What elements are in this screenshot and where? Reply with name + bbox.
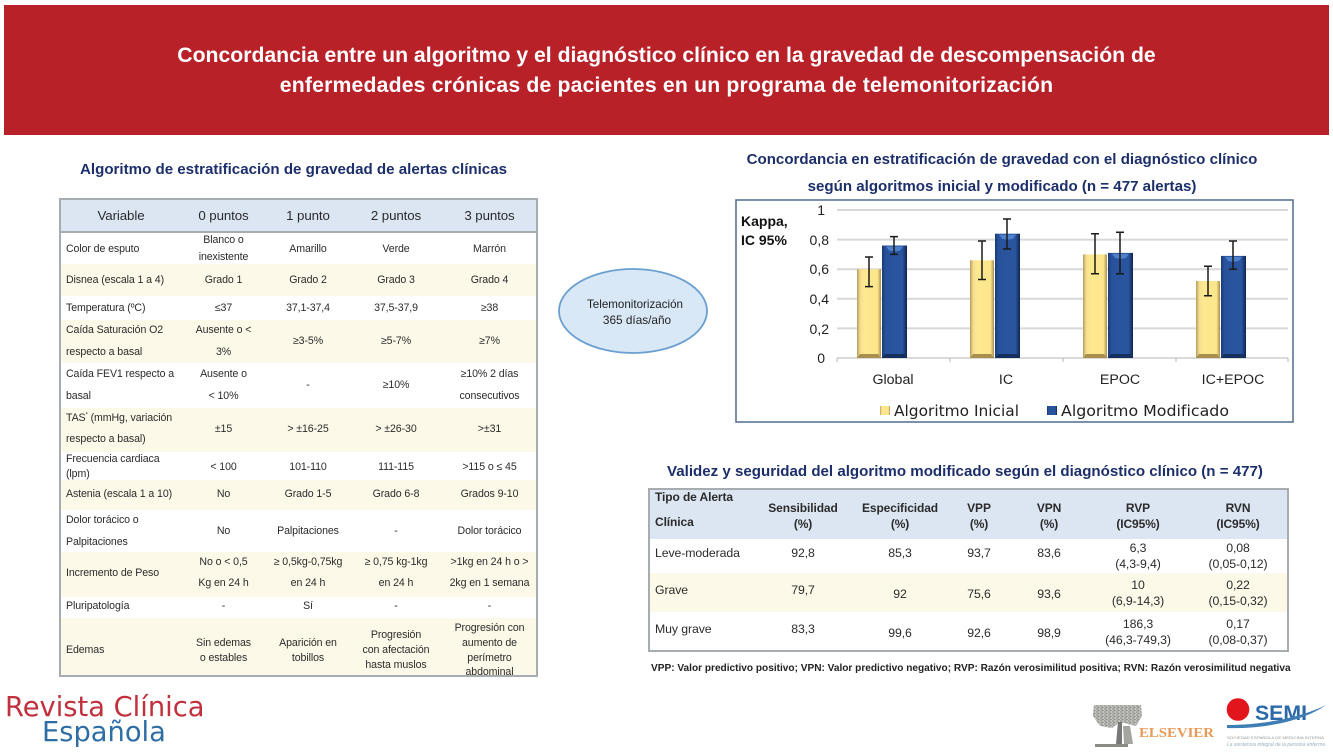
title: enfermedades crónicas de pacientes en un programa de telemonitorización	[280, 74, 1053, 97]
logo: Elsevier: ELSEVIER	[1139, 725, 1214, 740]
table: validity and safety: 92,6	[967, 626, 991, 640]
table: severity stratification algorithm: 2kg en 1 semana	[450, 577, 529, 589]
table: validity and safety: 0,17	[1226, 616, 1250, 630]
table: validity and safety: (IC95%)	[1116, 516, 1160, 530]
legend: Algoritmo Modificado	[1061, 402, 1229, 420]
title: Concordancia entre un algoritmo y el diagnóstico clínico en la gravedad de descompensación de	[177, 44, 1156, 67]
legend	[880, 402, 1229, 420]
ellipse: telemonitoring: Telemonitorización	[587, 297, 683, 311]
table: validity and safety: 10	[1131, 578, 1145, 592]
table: validity and safety: Clínica	[655, 515, 694, 529]
table: validity and safety: Tipo de Alerta	[655, 490, 733, 504]
table: validity and safety: (%)	[1040, 516, 1058, 530]
footnote: abbreviations: VPP: Valor predictivo positivo; VPN: Valor predictivo negativo; RVP: Razón verosimilitud positiva; RVN: Razón verosimilitud negativa	[651, 663, 1291, 674]
table: severity stratification algorithm: Verde	[382, 242, 410, 254]
logo: Revista Clínica Española: Española	[42, 717, 166, 748]
ellipse: telemonitoring: 365 días/año	[603, 313, 672, 327]
y axis labels: 0,6	[810, 261, 829, 277]
table: severity stratification algorithm: Variable	[98, 208, 144, 222]
heading: validity table: Validez y seguridad del algoritmo modificado según el diagnóstico clínico (n = 477)	[667, 463, 1263, 480]
table: severity stratification algorithm: -	[394, 600, 398, 612]
table: validity and safety: RVP	[1126, 500, 1150, 514]
table: severity stratification algorithm: Grado 1-5	[285, 488, 331, 500]
bars: IC	[970, 219, 1020, 358]
table: severity stratification algorithm: Incremento de Peso	[66, 566, 159, 578]
table: severity stratification algorithm: Progresión	[371, 629, 421, 641]
table: validity and safety: 6,3	[1130, 540, 1146, 554]
title	[177, 44, 1156, 97]
table: severity stratification algorithm: Ausente o <	[196, 324, 251, 336]
table: validity and safety: RVN	[1226, 500, 1250, 514]
table: severity stratification algorithm: ±15	[215, 422, 232, 434]
category labels: EPOC	[1100, 372, 1140, 388]
y axis labels: 0,8	[810, 232, 829, 248]
table: validity and safety: (46,3-749,3)	[1105, 632, 1171, 646]
axis title: Kappa,	[741, 213, 788, 229]
table: validity and safety: 0,08	[1226, 540, 1250, 554]
table: severity stratification algorithm: ≥3-5%	[293, 335, 323, 347]
table: severity stratification algorithm: ≥10%	[383, 379, 409, 391]
table: severity stratification algorithm: tobillos	[292, 652, 324, 664]
table: severity stratification algorithm: Pluripatología	[66, 600, 129, 612]
table: severity stratification algorithm: Kg en 24 h	[198, 577, 249, 589]
table: severity stratification algorithm: o estables	[200, 652, 247, 664]
table: validity and safety: 92	[893, 587, 907, 601]
table: severity stratification algorithm: con afectación	[363, 644, 429, 656]
table: severity stratification algorithm: -	[222, 600, 225, 612]
table: severity stratification algorithm: Sin edemas	[196, 637, 251, 649]
table: validity and safety: 79,7	[791, 582, 815, 596]
logo: Revista Clínica Española	[5, 692, 204, 748]
table: severity stratification algorithm: < 100	[210, 460, 237, 472]
table: severity stratification algorithm: Progresión con	[455, 622, 524, 634]
table: severity stratification algorithm: 3 puntos	[464, 208, 515, 222]
table: severity stratification algorithm: Caída FEV1 respecto a	[66, 368, 174, 380]
table: validity and safety: (%)	[970, 516, 988, 530]
table: severity stratification algorithm: -	[306, 379, 310, 391]
table: severity stratification algorithm: Aparición en	[279, 637, 337, 649]
table: severity stratification algorithm: No	[217, 525, 230, 537]
table: severity stratification algorithm: Grado 3	[377, 274, 415, 286]
table: validity and safety: 93,7	[967, 546, 991, 560]
table: severity stratification algorithm: ≥38	[481, 302, 498, 314]
y axis labels: 0,4	[810, 291, 829, 307]
table: severity stratification algorithm: -	[488, 600, 491, 612]
table: severity stratification algorithm: Blanco o	[203, 234, 244, 246]
table: validity and safety: (0,08-0,37)	[1208, 632, 1268, 646]
table: validity and safety: (%)	[891, 516, 909, 530]
table: severity stratification algorithm: < 10%	[209, 390, 238, 402]
table: severity stratification algorithm	[59, 198, 538, 677]
table: severity stratification algorithm: 101-110	[289, 460, 327, 472]
y axis labels	[810, 202, 829, 366]
bars: EPOC	[1083, 232, 1133, 358]
category labels: IC+EPOC	[1202, 372, 1264, 388]
table: severity stratification algorithm: Color de esputo	[66, 242, 139, 254]
table: validity and safety: 98,9	[1037, 626, 1061, 640]
table: severity stratification algorithm: Frecuencia cardiaca	[66, 453, 160, 465]
axis title: IC 95%	[741, 232, 787, 248]
y axis labels: 1	[817, 202, 825, 218]
table: severity stratification algorithm: >1kg en 24 h o >	[451, 556, 528, 568]
table: validity and safety: (0,05-0,12)	[1208, 556, 1268, 570]
table: validity and safety: 93,6	[1037, 587, 1061, 601]
table: severity stratification algorithm: > ±26-30	[375, 422, 417, 434]
table: severity stratification algorithm: Marrón	[473, 242, 506, 254]
table: severity stratification algorithm: TAS* (mmHg, variación	[66, 412, 172, 424]
table: validity and safety: 186,3	[1123, 616, 1153, 630]
table: severity stratification algorithm: ≥5-7%	[381, 335, 411, 347]
table: severity stratification algorithm: 1 punto	[286, 208, 330, 222]
table: severity stratification algorithm: 37,1-37,4	[286, 302, 330, 314]
table: severity stratification algorithm: ≤37	[215, 302, 232, 314]
ellipse: telemonitoring	[558, 268, 708, 354]
table: severity stratification algorithm: consecutivos	[459, 390, 520, 402]
table: severity stratification algorithm: Astenia (escala 1 a 10)	[66, 488, 172, 500]
table: severity stratification algorithm: Palpitaciones	[277, 525, 339, 537]
table: severity stratification algorithm: 37,5-37,9	[374, 302, 418, 314]
table: severity stratification algorithm: Grado 2	[289, 274, 327, 286]
bars: Global	[857, 237, 907, 358]
table: severity stratification algorithm: 111-115	[378, 460, 414, 472]
table: validity and safety: (IC95%)	[1216, 516, 1260, 530]
heading: algorithm table: Algoritmo de estratificación de gravedad de alertas clínicas	[80, 161, 507, 178]
table: validity and safety: Especificidad	[862, 500, 938, 514]
category labels	[872, 372, 1264, 388]
table: severity stratification algorithm: respecto a basal	[66, 346, 142, 358]
table: validity and safety: 92,8	[791, 546, 815, 560]
heading: concordance chart	[747, 151, 1257, 195]
table: severity stratification algorithm: >115 o ≤ 45	[462, 460, 517, 472]
table: severity stratification algorithm: Grados 9-10	[461, 488, 518, 500]
category labels: IC	[999, 372, 1013, 388]
table: severity stratification algorithm: Sí	[303, 600, 313, 612]
table: severity stratification algorithm: Grado 4	[471, 274, 508, 286]
table: severity stratification algorithm: -	[394, 525, 398, 537]
table: severity stratification algorithm: 0 puntos	[198, 208, 249, 222]
logo: Elsevier	[1093, 705, 1214, 747]
table: validity and safety: Muy grave	[655, 622, 712, 636]
table: validity and safety: VPN	[1037, 500, 1061, 514]
legend: Algoritmo Inicial	[894, 402, 1019, 420]
logo: SEMI	[1226, 698, 1326, 748]
y axis labels: 0,2	[810, 321, 829, 337]
table: severity stratification algorithm: aumento de	[462, 637, 517, 649]
table: severity stratification algorithm: Dolor torácico	[458, 525, 521, 537]
heading: concordance chart: según algoritmos inicial y modificado (n = 477 alertas)	[808, 178, 1196, 195]
table: severity stratification algorithm: Palpitaciones	[66, 536, 128, 548]
table: severity stratification algorithm: basal	[66, 390, 91, 402]
heading: concordance chart: Concordancia en estratificación de gravedad con el diagnóstico clínico	[747, 151, 1257, 168]
table: validity and safety: 0,22	[1226, 578, 1250, 592]
table: severity stratification algorithm: ≥10% 2 días	[461, 368, 518, 380]
table: severity stratification algorithm: Grado 6-8	[373, 488, 419, 500]
table: severity stratification algorithm: (lpm)	[66, 468, 90, 480]
table: severity stratification algorithm: Disnea (escala 1 a 4)	[66, 274, 164, 286]
table: severity stratification algorithm: ≥ 0,75 kg-1kg	[365, 556, 427, 568]
table: severity stratification algorithm: hasta muslos	[365, 659, 427, 671]
logo: SEMI: SEMI	[1255, 702, 1307, 725]
table: validity and safety: 99,6	[888, 626, 912, 640]
category labels: Global	[872, 372, 914, 388]
table: severity stratification algorithm: >±31	[478, 422, 501, 434]
table: severity stratification algorithm: Edemas	[66, 644, 104, 656]
table: validity and safety: (6,9-14,3)	[1112, 594, 1164, 608]
table: severity stratification algorithm: perímetro	[467, 652, 512, 664]
table: severity stratification algorithm: 2 puntos	[371, 208, 421, 222]
table: severity stratification algorithm: > ±16-25	[287, 422, 329, 434]
y axis labels: 0	[817, 350, 825, 366]
table: severity stratification algorithm: No	[217, 488, 230, 500]
table: severity stratification algorithm: en 24 h	[291, 577, 325, 589]
table: severity stratification algorithm: No o < 0,5	[199, 556, 248, 568]
logo: SEMI: SOCIEDAD ESPAÑOLA DE MEDICINA INTERNA	[1227, 735, 1324, 740]
table: validity and safety: Leve-moderada	[655, 546, 740, 560]
table: severity stratification algorithm: respecto a basal)	[66, 433, 146, 445]
table: validity and safety: 83,3	[791, 622, 815, 636]
bar chart: kappa by algorithm	[735, 199, 1294, 423]
table: validity and safety: (4,3-9,4)	[1115, 556, 1161, 570]
table: severity stratification algorithm: inexistente	[199, 251, 248, 263]
bars: IC+EPOC	[1196, 241, 1246, 358]
axis title	[741, 213, 788, 248]
table: validity and safety: 75,6	[967, 587, 991, 601]
table: validity and safety	[648, 488, 1289, 652]
table: severity stratification algorithm: Grado 1	[205, 274, 242, 286]
table: severity stratification algorithm: 3%	[216, 346, 231, 358]
table: validity and safety: (0,15-0,32)	[1208, 594, 1268, 608]
table: severity stratification algorithm: en 24 h	[379, 577, 413, 589]
table: severity stratification algorithm: ≥7%	[479, 335, 500, 347]
table: severity stratification algorithm: Caída Saturación O2	[66, 324, 163, 336]
title banner	[4, 5, 1329, 135]
table: validity and safety: Grave	[655, 582, 688, 596]
logo: SEMI: La asistencia integral de la persona enferma	[1227, 742, 1325, 748]
table: severity stratification algorithm: ≥ 0,5kg-0,75kg	[274, 556, 342, 568]
table: severity stratification algorithm: Ausente o	[200, 368, 247, 380]
table: validity and safety: 83,6	[1037, 546, 1061, 560]
table: severity stratification algorithm: Dolor torácico o	[66, 514, 139, 526]
table: severity stratification algorithm: Temperatura (ºC)	[66, 302, 145, 314]
logo: Revista Clínica Española: Revista Clínica	[5, 692, 204, 723]
table: validity and safety: Sensibilidad	[768, 500, 838, 514]
table: severity stratification algorithm: abdominal	[466, 666, 513, 678]
table: validity and safety: (%)	[794, 516, 812, 530]
table: validity and safety: VPP	[967, 500, 991, 514]
table: validity and safety: 85,3	[888, 546, 912, 560]
table: severity stratification algorithm: Amarillo	[289, 242, 327, 254]
